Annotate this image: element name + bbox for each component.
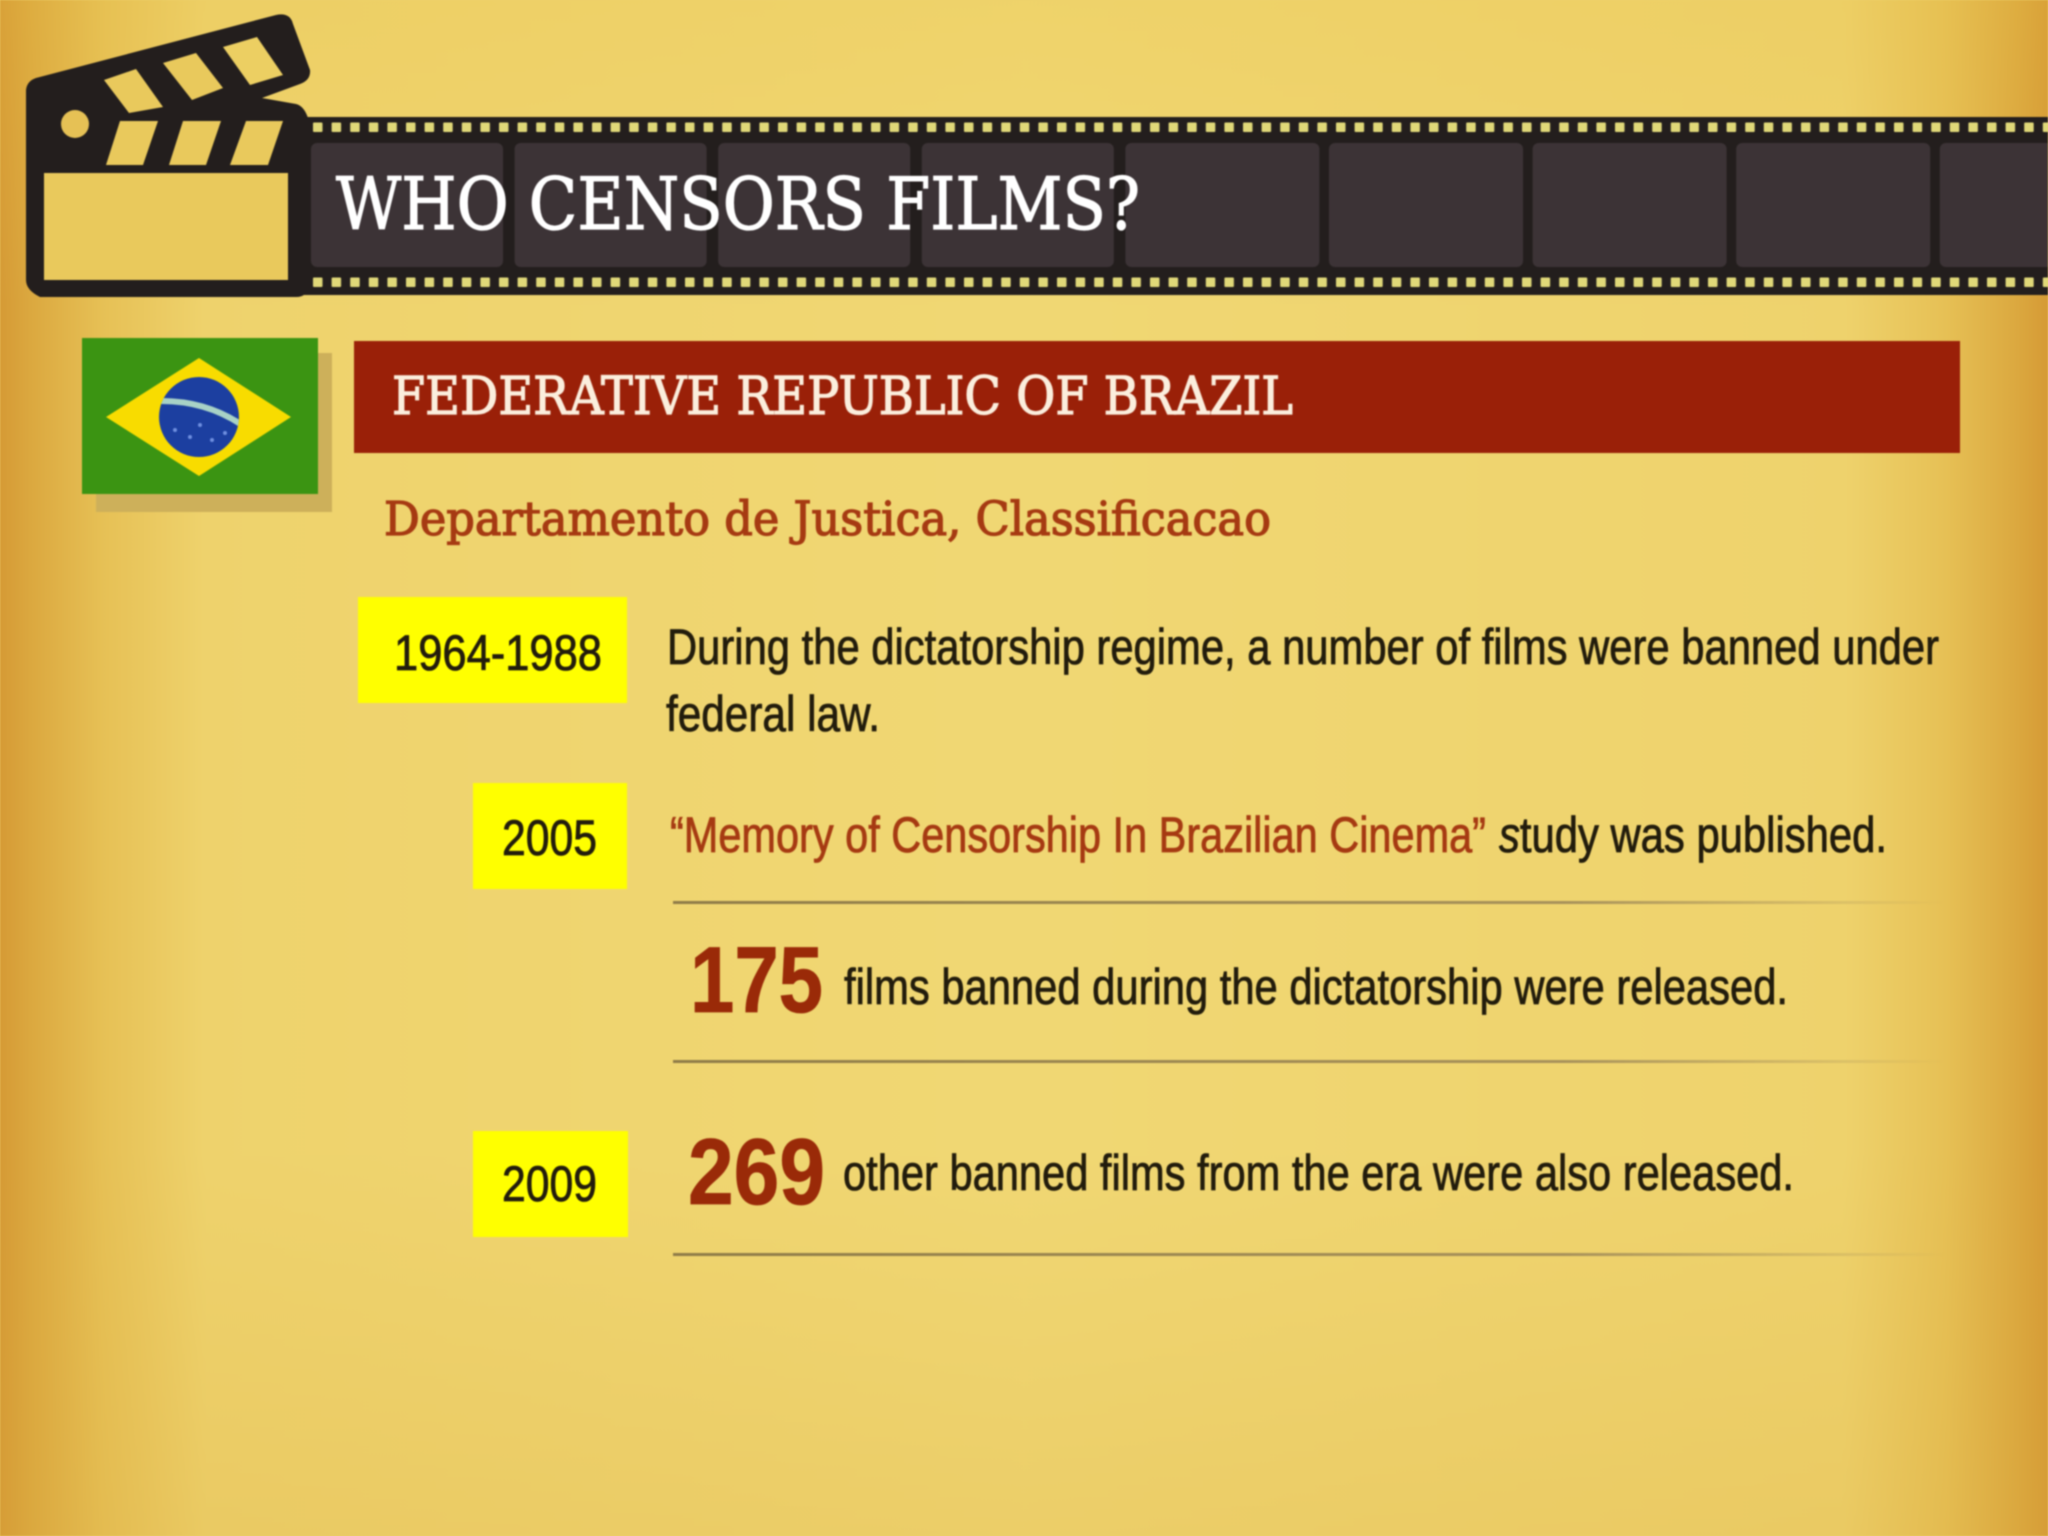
header film strip — [290, 117, 2048, 295]
year tag: 2009 — [473, 1131, 628, 1237]
censoring body heading: Departamento de Justica, Classificacao — [384, 492, 1271, 547]
stat: 175 films released: films banned during the dictatorship were released. — [844, 959, 1788, 1015]
stat: 175 films released: 175 — [690, 927, 823, 1032]
stat: 269 films released — [688, 1119, 1794, 1224]
icon: Brazil flag — [82, 338, 332, 512]
text: study published: study was published. — [1499, 807, 1887, 863]
year tag: 1964-1988 — [358, 597, 627, 703]
country banner: FEDERATIVE REPUBLIC OF BRAZIL — [392, 367, 1293, 427]
text: dictatorship regime — [666, 619, 1939, 742]
title: WHO CENSORS FILMS? — [336, 162, 1140, 246]
year tag: 2009: 2009 — [502, 1156, 597, 1212]
text: study published: “Memory of Censorship In Brazilian Cinema” — [670, 807, 1486, 863]
text: dictatorship regime: federal law. — [666, 686, 880, 742]
stat: 269 films released: other banned films from the era were also released. — [843, 1145, 1794, 1201]
icon: clapperboard — [26, 14, 310, 297]
year tag: 1964-1988: 1964-1988 — [394, 625, 602, 681]
year tag: 2005: 2005 — [502, 810, 597, 866]
stat: 175 films released — [690, 927, 1788, 1032]
year tag: 2005 — [473, 783, 627, 889]
country banner — [354, 341, 1960, 453]
stat: 269 films released: 269 — [688, 1119, 825, 1224]
